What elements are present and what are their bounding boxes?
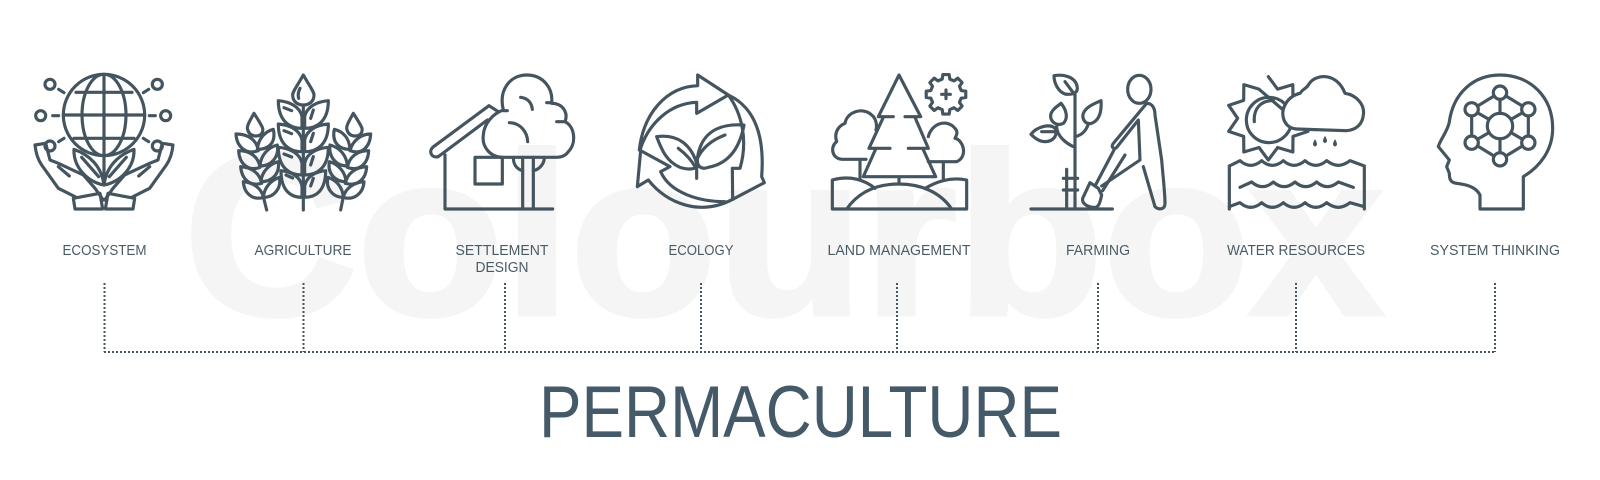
label: agriculture: AGRICULTURE bbox=[254, 242, 352, 259]
icon: land management bbox=[832, 75, 967, 209]
icon: water resources bbox=[1229, 77, 1364, 209]
icon: agriculture bbox=[236, 75, 371, 210]
icon: ecosystem bbox=[35, 74, 173, 209]
watermark: Colourbox bbox=[184, 106, 1383, 363]
title: PERMACULTURE bbox=[539, 372, 1062, 453]
icon: farming bbox=[1031, 75, 1165, 209]
icon: system thinking bbox=[1438, 75, 1553, 209]
label: farming: FARMING bbox=[1066, 242, 1130, 259]
dotted connector bbox=[104, 283, 1495, 352]
label: settlement design: DESIGN bbox=[476, 259, 528, 276]
icon: ecology bbox=[637, 75, 764, 207]
label: land management: LAND MANAGEMENT bbox=[828, 242, 970, 259]
label: system thinking: SYSTEM THINKING bbox=[1430, 242, 1560, 259]
icon: settlement design bbox=[431, 75, 574, 209]
label: settlement design: SETTLEMENT bbox=[456, 242, 548, 259]
label: ecology: ECOLOGY bbox=[668, 242, 734, 259]
label: water resources: WATER RESOURCES bbox=[1227, 242, 1365, 259]
label: ecosystem: ECOSYSTEM bbox=[62, 242, 146, 259]
